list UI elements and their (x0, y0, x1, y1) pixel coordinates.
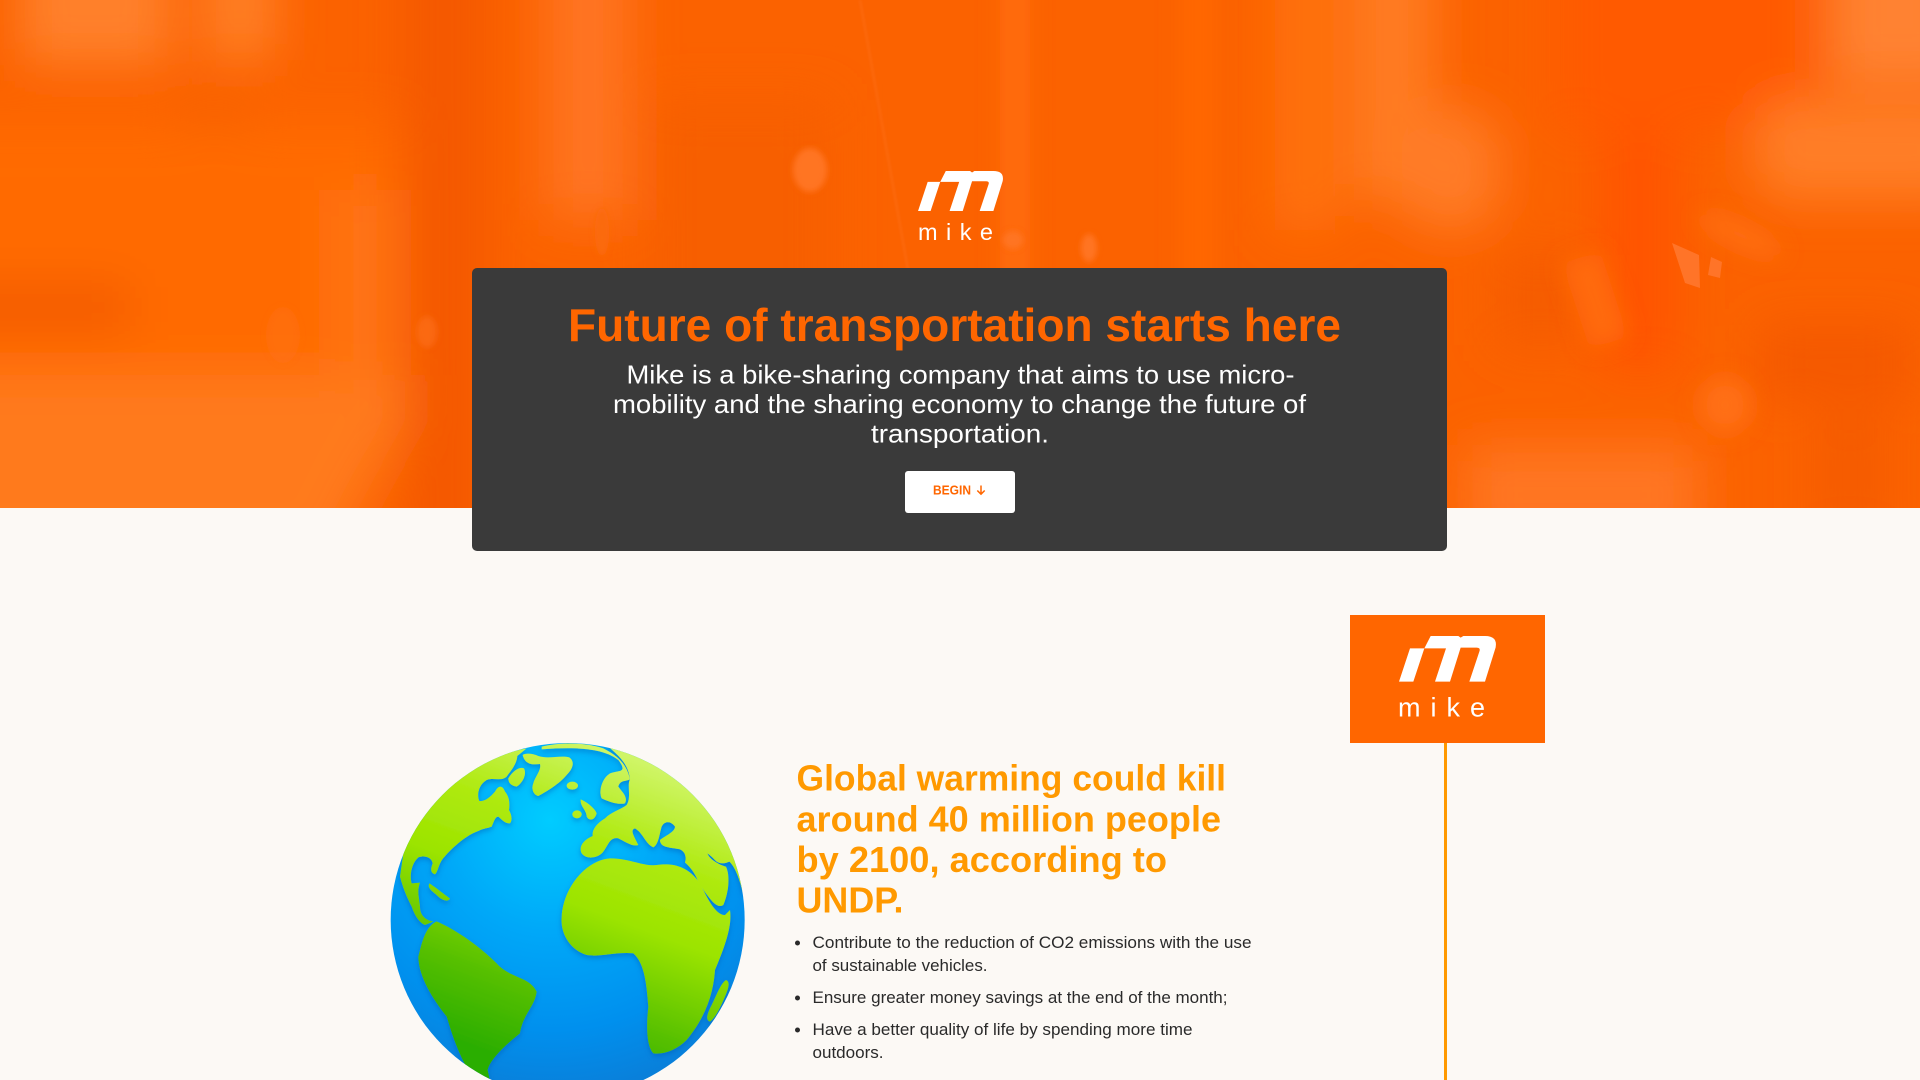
intro text (613, 360, 1307, 448)
bullet list: outdoors. (812, 1044, 884, 1062)
panel: hero background (0, 0, 1920, 560)
icon: globe (391, 743, 747, 1080)
heading: global warming: around 40 million people (796, 798, 1221, 840)
panel: logo flag (1350, 615, 1545, 1080)
bullet list (795, 934, 1252, 1062)
timeline line (1444, 743, 1447, 1080)
intro text: Mike is a bike-sharing company that aims to use micro- (626, 360, 1294, 390)
heading: global warming: by 2100, according to (796, 839, 1167, 880)
continents (400, 743, 747, 1080)
bullet list: Ensure greater money savings at the end of the month; (812, 989, 1228, 1007)
intro text: mobility and the sharing economy to change the future of (613, 389, 1307, 419)
panel: global warming text (795, 758, 1252, 1062)
icon: m mark (1399, 636, 1496, 682)
bullet list: Contribute to the reduction of CO2 emissions with the use (812, 934, 1252, 952)
panel: intro card (472, 268, 1447, 551)
icon: m mark (918, 171, 1003, 211)
heading: global warming: Global warming could kill (796, 758, 1226, 798)
wordmark: mike (918, 219, 993, 245)
shard highlight (1672, 243, 1722, 288)
button: begin: BEGIN (933, 482, 971, 498)
bullet list: Have a better quality of life by spending more time (812, 1021, 1192, 1039)
heading: global warming (796, 758, 1226, 920)
heading: global warming: UNDP. (796, 880, 904, 920)
title: Future of transportation starts here (568, 299, 1341, 351)
wordmark: mike (1398, 692, 1485, 722)
bullet list: of sustainable vehicles. (812, 957, 988, 975)
button: begin (905, 471, 1015, 513)
logo box (1350, 615, 1545, 743)
icon: down arrow (977, 486, 985, 494)
light streak (860, 0, 908, 270)
logo: hero mike (918, 171, 1003, 245)
intro text: transportation. (871, 418, 1049, 448)
